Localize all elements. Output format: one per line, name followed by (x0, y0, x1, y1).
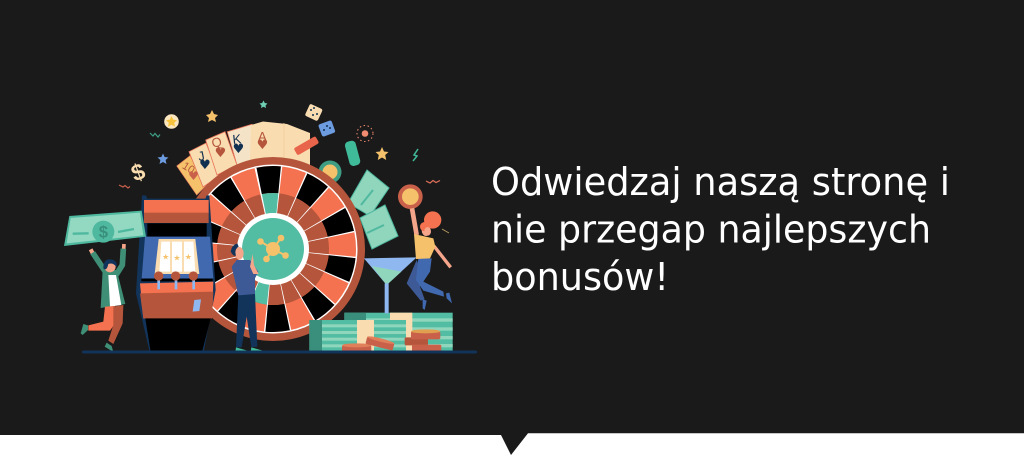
playing cards fan: ♥ (233, 142, 244, 157)
playing cards fan: A (258, 129, 267, 144)
playing cards fan: ♥ (215, 146, 226, 161)
person holding banknote: $ (99, 223, 109, 242)
person holding banknote (64, 211, 146, 352)
playing cards fan (177, 122, 310, 195)
flying chips (294, 136, 361, 184)
headline text: Odwiedzaj naszą stronę i (491, 160, 950, 204)
playing cards fan: K (232, 131, 242, 147)
money stacks (309, 313, 453, 351)
slot machine: ★ (162, 252, 169, 261)
slot machine: ★ (185, 252, 192, 261)
playing cards fan: Q (210, 134, 224, 151)
woman holding chip (398, 185, 452, 310)
decorations: stars, sparks and dollar sign (119, 100, 449, 233)
playing cards fan: ♥ (188, 169, 199, 183)
playing cards fan: J (197, 148, 206, 164)
slot machine: ★ (173, 254, 181, 263)
dice (305, 104, 336, 137)
decorations: stars, sparks and dollar sign: $ (128, 158, 149, 186)
ground line (82, 350, 477, 354)
roulette wheel (181, 157, 365, 341)
flying banknotes (348, 170, 398, 249)
stacks of coins (342, 329, 441, 353)
illustration: casino scene (64, 100, 477, 354)
playing cards fan: 10 (180, 160, 197, 177)
cocktail glass (364, 257, 417, 313)
slot machine (136, 195, 216, 353)
headline text (491, 160, 950, 299)
person looking at wheel (231, 243, 263, 352)
playing cards fan: ♥ (199, 158, 211, 173)
headline text: nie przegap najlepszych (491, 208, 931, 252)
playing cards fan: ♥ (257, 138, 268, 153)
headline text: bonusów! (491, 255, 669, 299)
